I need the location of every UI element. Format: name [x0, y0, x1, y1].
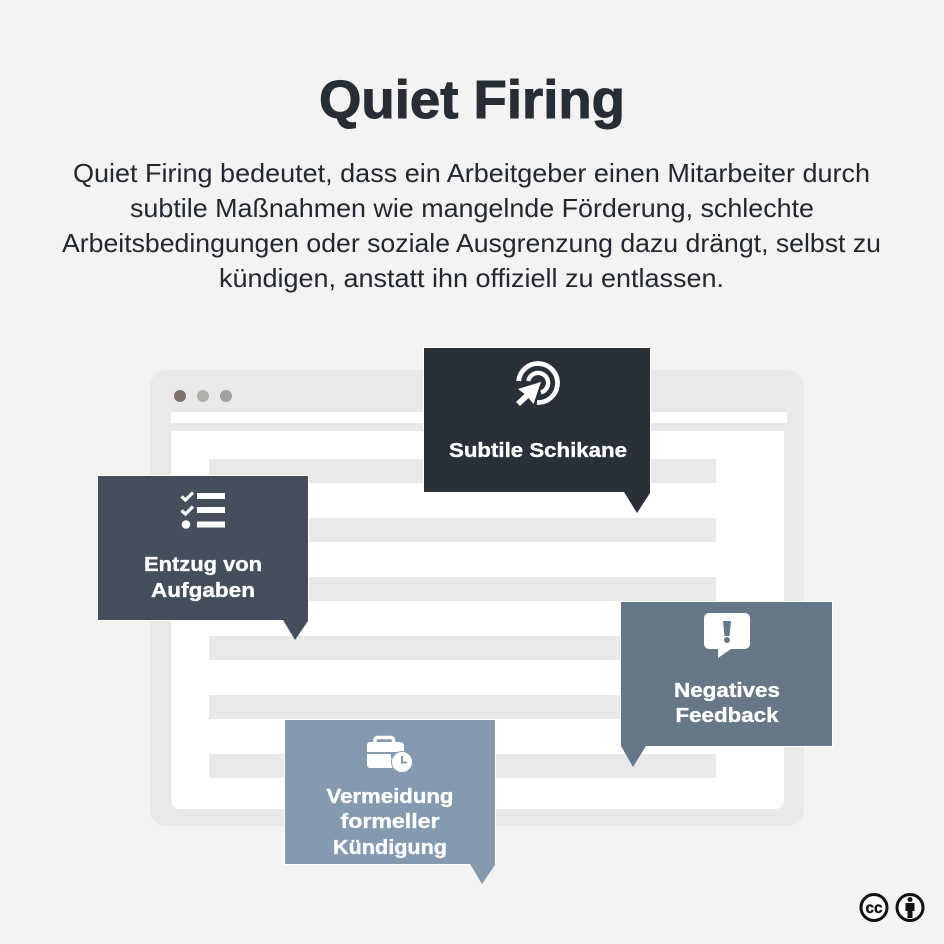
callout: Vermeidung formeller Kündigung: Vermeidung	[326, 786, 454, 808]
callout: Subtile Schikane: Subtile Schikane	[449, 440, 627, 462]
callout: Entzug von Aufgaben: Entzug von	[144, 554, 262, 576]
intro text: Quiet Firing bedeutet, dass ein Arbeitgeber einen Mitarbeiter durch	[73, 158, 870, 188]
icon: speech bubble with exclamation mark	[704, 613, 750, 658]
callout: Negatives Feedback	[620, 602, 832, 767]
icon: target with cursor	[516, 364, 557, 406]
address bar	[171, 412, 787, 423]
window control dots	[174, 390, 232, 402]
callout: Vermeidung formeller Kündigung: formeller	[340, 811, 440, 833]
intro text: subtile Maßnahmen wie mangelnde Förderung, schlechte	[130, 193, 814, 223]
intro text: Arbeitsbedingungen oder soziale Ausgrenzung dazu drängt, selbst zu	[62, 228, 881, 258]
title: Quiet Firing	[319, 70, 625, 130]
page content with placeholder lines	[171, 431, 784, 809]
icon: creative commons license	[861, 894, 923, 920]
browser window illustration	[150, 370, 804, 826]
callout: Subtile Schikane	[424, 348, 650, 513]
callout: Negatives Feedback: Negatives	[674, 680, 780, 702]
intro text	[62, 158, 881, 293]
callout: Vermeidung formeller Kündigung: Kündigung	[333, 837, 447, 859]
callout: Vermeidung formeller Kündigung	[284, 720, 496, 884]
callout: Entzug von Aufgaben	[98, 476, 308, 640]
icon: checklist	[182, 492, 225, 529]
icon: briefcase with clock	[367, 738, 412, 772]
icon: creative commons license: cc	[866, 900, 883, 917]
intro text: kündigen, anstatt ihn offiziell zu entlassen.	[219, 263, 724, 293]
callout: Entzug von Aufgaben: Aufgaben	[151, 580, 255, 602]
callout: Negatives Feedback: Feedback	[676, 705, 779, 727]
